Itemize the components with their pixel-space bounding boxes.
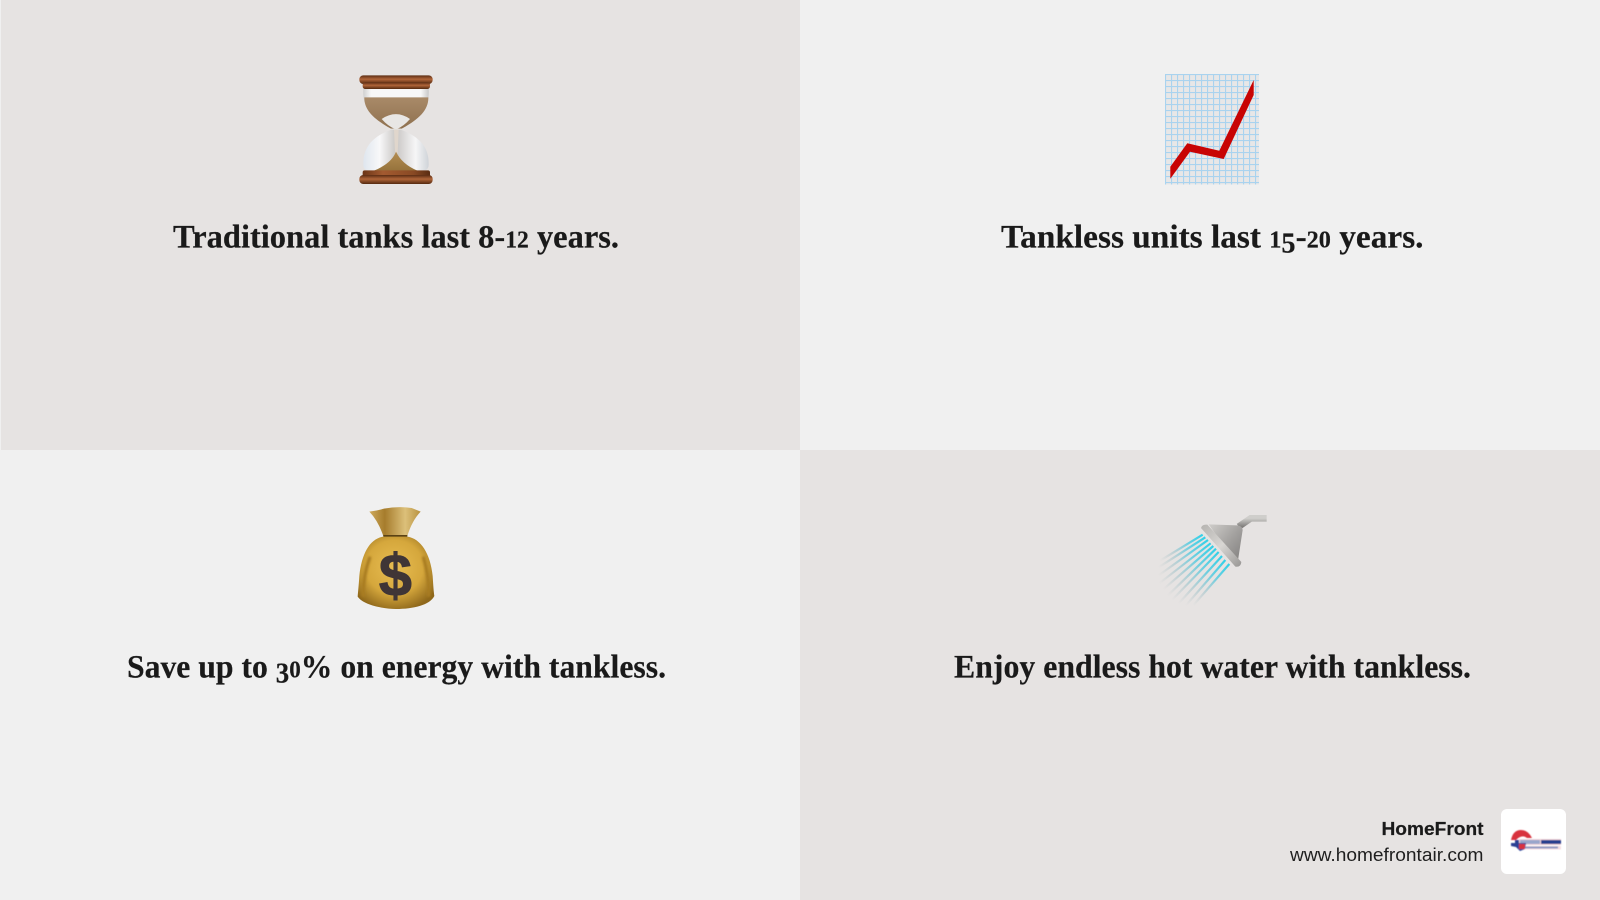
panel: energy savings [0, 450, 800, 900]
brand footer [1289, 809, 1566, 874]
icon: hourglass [359, 75, 433, 184]
icon: shower head [1159, 518, 1267, 605]
icon: rising chart [1165, 74, 1259, 184]
heading: energy savings: % on energy with tankless. [301, 650, 681, 686]
website url: www.homefrontair.com [1289, 845, 1484, 865]
panel: tankless lifespan [800, 0, 1600, 450]
heading: energy savings: Save up to [127, 650, 274, 686]
heading: endless hot water: Enjoy endless hot water with tankless. [954, 650, 1471, 686]
heading: tankless units: 5 [1281, 228, 1296, 260]
heading: tankless units: 20 years. [1307, 220, 1423, 256]
heading: tankless units: - [1296, 220, 1307, 256]
icon: money bag [358, 507, 434, 609]
panel: traditional tank lifespan [0, 0, 800, 450]
icon glyph: dollar sign: $ [379, 542, 412, 609]
heading: tankless units: Tankless units last 1 [1001, 220, 1281, 256]
heading: traditional tanks: Traditional tanks last 8-12 years. [173, 220, 619, 256]
logo card [1501, 809, 1566, 874]
brand name: HomeFront [1382, 818, 1484, 839]
heading: energy savings: 0 [289, 658, 301, 684]
heading: energy savings: 3 [276, 658, 289, 690]
panel: endless hot water [800, 450, 1600, 900]
